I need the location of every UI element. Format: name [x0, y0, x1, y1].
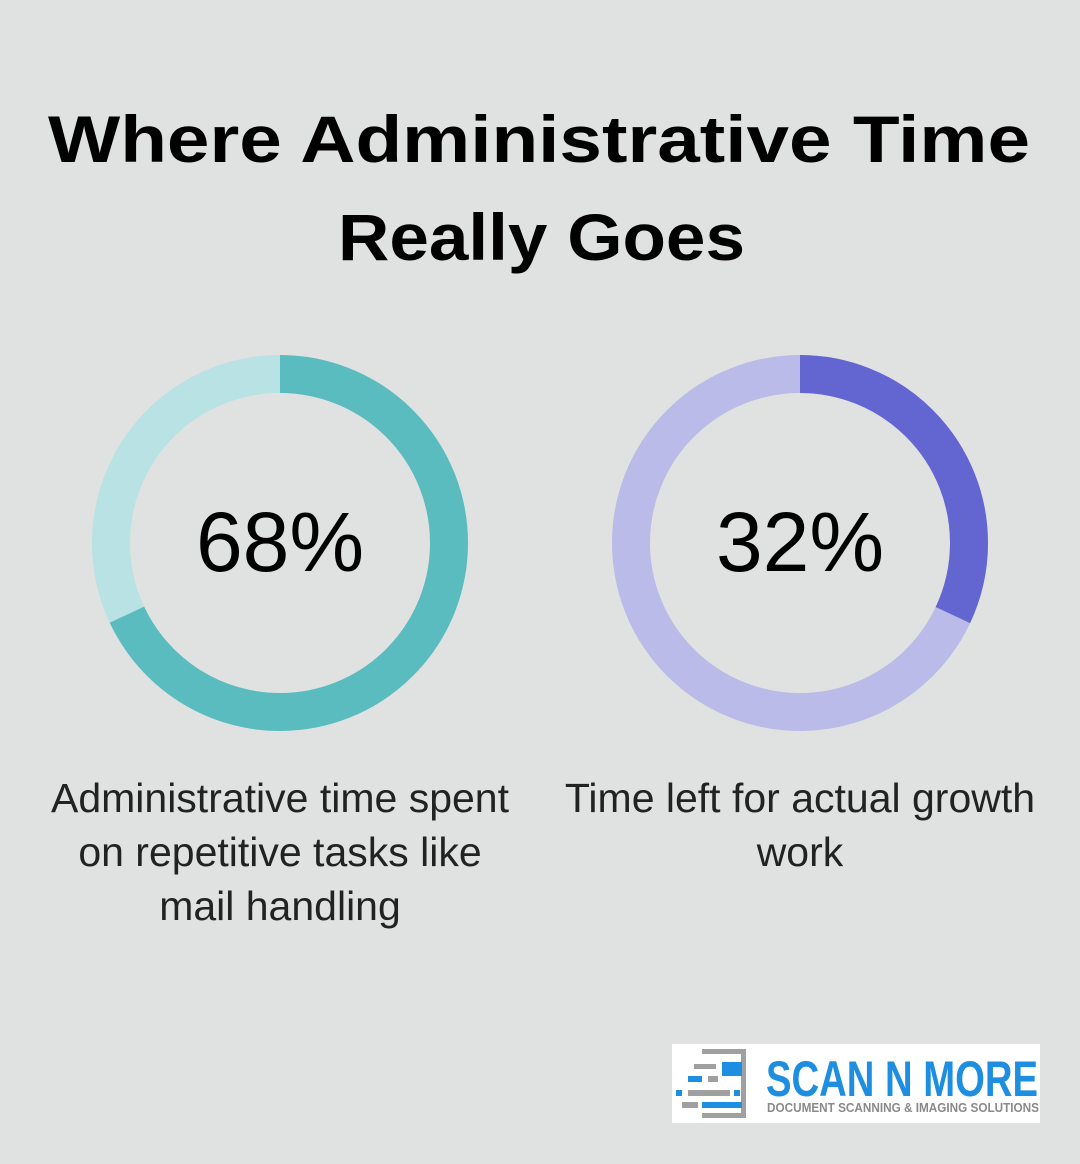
label: 68%: Administrative time spent	[51, 775, 509, 821]
label: 68%	[51, 775, 509, 929]
label: 32%	[565, 775, 1035, 875]
label: 32%: Time left for actual growth	[565, 775, 1035, 821]
donut chart: 32%: 32%	[716, 495, 884, 589]
donut chart: 68%	[92, 355, 468, 731]
logo	[672, 1044, 1040, 1123]
donut chart: 32%	[612, 355, 988, 731]
title	[48, 102, 1030, 274]
title: Where Administrative Time	[48, 102, 1030, 176]
title: Really Goes	[338, 200, 745, 274]
label: 32%: work	[757, 829, 843, 875]
donut chart: 68%: 68%	[196, 495, 364, 589]
label: 68%: mail handling	[159, 883, 401, 929]
label: 68%: on repetitive tasks like	[78, 829, 482, 875]
icon: scanner	[676, 1049, 746, 1118]
